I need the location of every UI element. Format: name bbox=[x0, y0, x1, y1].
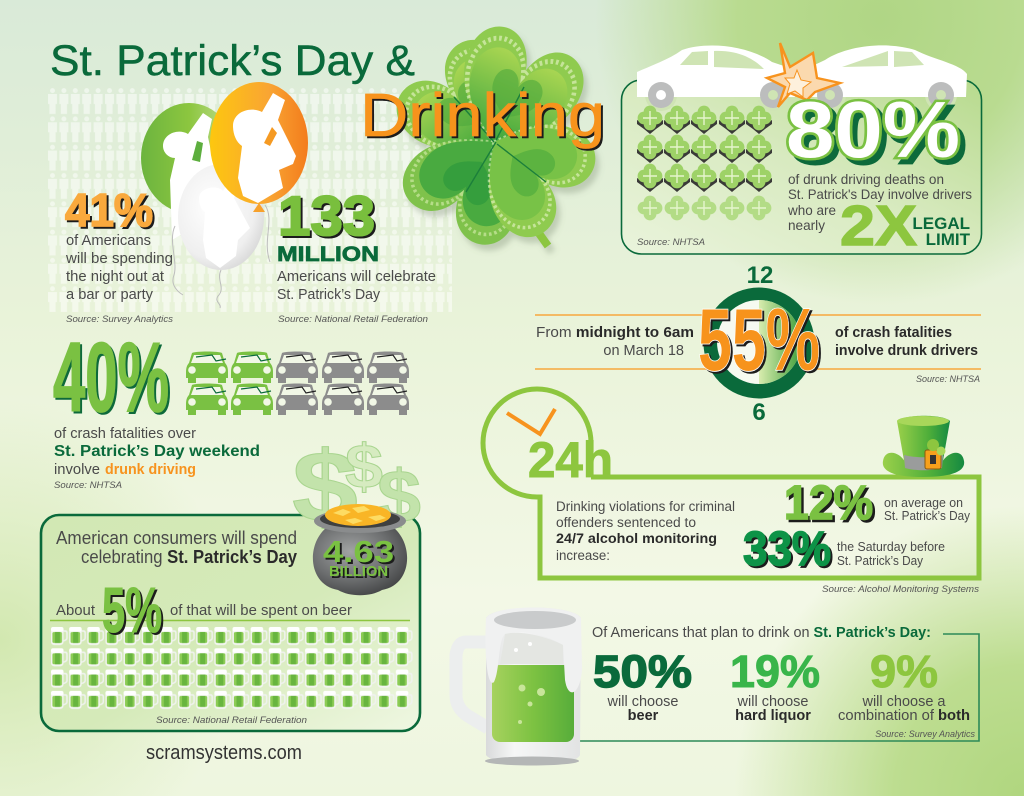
stat: 133 million bbox=[277, 184, 436, 324]
balloons bbox=[141, 82, 308, 308]
stat: 2X legal limit: LIMIT bbox=[926, 230, 971, 249]
stat: 2X legal limit: LEGAL bbox=[912, 214, 970, 233]
stat: 12%: on average on bbox=[884, 495, 963, 510]
heading: American consumers will spend bbox=[56, 528, 297, 548]
text: 4.63 billion bbox=[323, 534, 394, 580]
stat: 55%: 55% bbox=[698, 290, 820, 389]
stat: 133 million: Americans will celebrate bbox=[277, 268, 436, 285]
description: involve bbox=[54, 462, 100, 478]
clock bbox=[704, 288, 814, 398]
description: St. Patrick's Day involve drivers bbox=[788, 186, 972, 202]
stat: 41%: 41% bbox=[65, 184, 153, 236]
green balloon bbox=[141, 103, 237, 240]
title: St. Patrick’s Day & bbox=[50, 37, 415, 85]
section: midnight to 6am bbox=[535, 262, 981, 426]
stat: 33% bbox=[743, 523, 945, 576]
text: about 5%: of that will be spent on beer bbox=[170, 602, 352, 619]
stat: 41%: the night out at bbox=[66, 268, 165, 285]
text: about 5%: About bbox=[56, 602, 96, 619]
stat: 33%: 33% bbox=[743, 523, 831, 576]
icon: dollar signs: $ bbox=[377, 455, 421, 538]
stat: 9% both: will choose a bbox=[861, 694, 946, 710]
website: scramsystems.com bbox=[146, 742, 302, 764]
shamrock bbox=[385, 17, 607, 255]
icon: beer mug bbox=[456, 608, 582, 766]
panel: drink choices: Source: Survey Analytics bbox=[875, 729, 975, 739]
description bbox=[54, 426, 260, 490]
stat: 12%: St. Patrick’s Day bbox=[884, 508, 970, 523]
stat: 12% bbox=[784, 477, 970, 530]
icon: dollar signs: $ bbox=[345, 433, 383, 502]
car pictogram bbox=[186, 352, 409, 415]
text: 4.63 billion: BILLION bbox=[329, 563, 388, 580]
icon: dollar signs: $ bbox=[292, 431, 358, 543]
stat: 80%: 80% bbox=[786, 85, 960, 174]
stat: 2X legal limit: 2X bbox=[840, 194, 917, 258]
stat: 50% beer: will choose bbox=[607, 694, 678, 710]
heading bbox=[56, 528, 297, 567]
clover pictogram bbox=[637, 106, 772, 220]
icon: crash star bbox=[767, 43, 840, 107]
stat: 33%: the Saturday before bbox=[837, 539, 945, 554]
stat: 19% hard liquor: will choose bbox=[737, 694, 808, 710]
people pictogram grid bbox=[47, 88, 452, 312]
description: Source: NHTSA bbox=[54, 480, 122, 490]
section: midnight to 6am: 6 bbox=[752, 399, 766, 426]
title: Drinking: Drinking bbox=[360, 81, 605, 149]
stat: 41%: Source: Survey Analytics bbox=[66, 314, 174, 324]
stat: 50% beer bbox=[593, 646, 692, 724]
stat: 2X legal limit bbox=[840, 194, 971, 258]
panel: consumer spending bbox=[41, 431, 421, 731]
stat: 50% beer: 50% bbox=[593, 646, 692, 697]
section: midnight to 6am: Source: NHTSA bbox=[916, 374, 980, 384]
stat: 41%: will be spending bbox=[65, 250, 173, 267]
stat: 9% both bbox=[838, 646, 970, 724]
description: nearly bbox=[788, 217, 825, 233]
description bbox=[556, 499, 735, 563]
stat: 40% crash fatalities bbox=[53, 322, 409, 490]
stat: 133 million: 133 bbox=[278, 184, 375, 247]
icon: pot of gold bbox=[313, 504, 407, 595]
stat: 9% both: combination of both bbox=[838, 708, 970, 724]
description: St. Patrick’s Day weekend bbox=[54, 443, 260, 460]
section: midnight to 6am: of crash fatalities bbox=[835, 325, 952, 341]
description: Drinking violations for criminal bbox=[556, 499, 735, 514]
stat: 41%: of Americans bbox=[66, 232, 151, 249]
panel: 24/7 alcohol monitoring: Source: Alcohol Monitoring Systems bbox=[822, 584, 980, 594]
stat: 40% crash fatalities: 40% bbox=[53, 322, 169, 432]
panel: 24/7 alcohol monitoring bbox=[483, 389, 980, 594]
stat: 41%: a bar or party bbox=[66, 286, 153, 303]
stat: 50% beer: beer bbox=[628, 708, 659, 724]
text: 4.63 billion: 4.63 bbox=[323, 534, 394, 569]
description bbox=[787, 171, 972, 233]
description: 24/7 alcohol monitoring bbox=[556, 531, 717, 546]
stat: 133 million: St. Patrick’s Day bbox=[277, 286, 380, 303]
stat: 41% bbox=[65, 184, 174, 324]
orange balloon bbox=[210, 82, 308, 262]
icon: crashing cars bbox=[637, 45, 967, 111]
description: of drunk driving deaths on bbox=[788, 171, 944, 187]
description: drunk driving bbox=[105, 462, 196, 478]
icon: leprechaun hat bbox=[883, 416, 964, 477]
panel: 80% drunk driving deaths: Source: NHTSA bbox=[637, 237, 705, 247]
heading: 24h: 24h bbox=[528, 432, 613, 488]
section: midnight to 6am: From midnight to 6am bbox=[536, 325, 694, 341]
description: of crash fatalities over bbox=[54, 426, 196, 442]
panel: consumer spending: Source: National Retail Federation bbox=[156, 715, 307, 725]
description: offenders sentenced to bbox=[556, 515, 696, 530]
white balloon bbox=[172, 164, 264, 308]
stat: 19% hard liquor: 19% bbox=[730, 646, 820, 697]
mug pictogram bbox=[50, 625, 413, 710]
stat: 19% hard liquor bbox=[730, 646, 820, 724]
section: midnight to 6am: involve drunk drivers bbox=[835, 343, 978, 359]
icon: clock hands bbox=[507, 409, 555, 434]
heading: Of Americans that plan to drink on St. Patrick’s Day: bbox=[592, 625, 931, 641]
stat: 12%: 12% bbox=[784, 477, 873, 530]
icon: dollar signs bbox=[292, 431, 421, 543]
panel: drink choices bbox=[456, 608, 979, 766]
stat: 19% hard liquor: hard liquor bbox=[735, 708, 811, 724]
section: midnight to 6am: on March 18 bbox=[603, 343, 684, 359]
stat: 9% both: 9% bbox=[870, 646, 938, 697]
text: about 5%: 5% bbox=[102, 574, 162, 646]
description: increase: bbox=[556, 548, 610, 563]
heading: celebrating St. Patrick’s Day bbox=[81, 547, 297, 567]
text: about 5% bbox=[50, 574, 410, 646]
section: midnight to 6am: 12 bbox=[747, 262, 773, 289]
stat: 33%: St. Patrick’s Day bbox=[837, 553, 923, 568]
description: who are bbox=[787, 202, 836, 218]
stat: 133 million: MILLION bbox=[277, 243, 379, 266]
panel: 80% drunk driving deaths bbox=[622, 43, 982, 258]
stat: 133 million: Source: National Retail Federation bbox=[278, 314, 428, 324]
